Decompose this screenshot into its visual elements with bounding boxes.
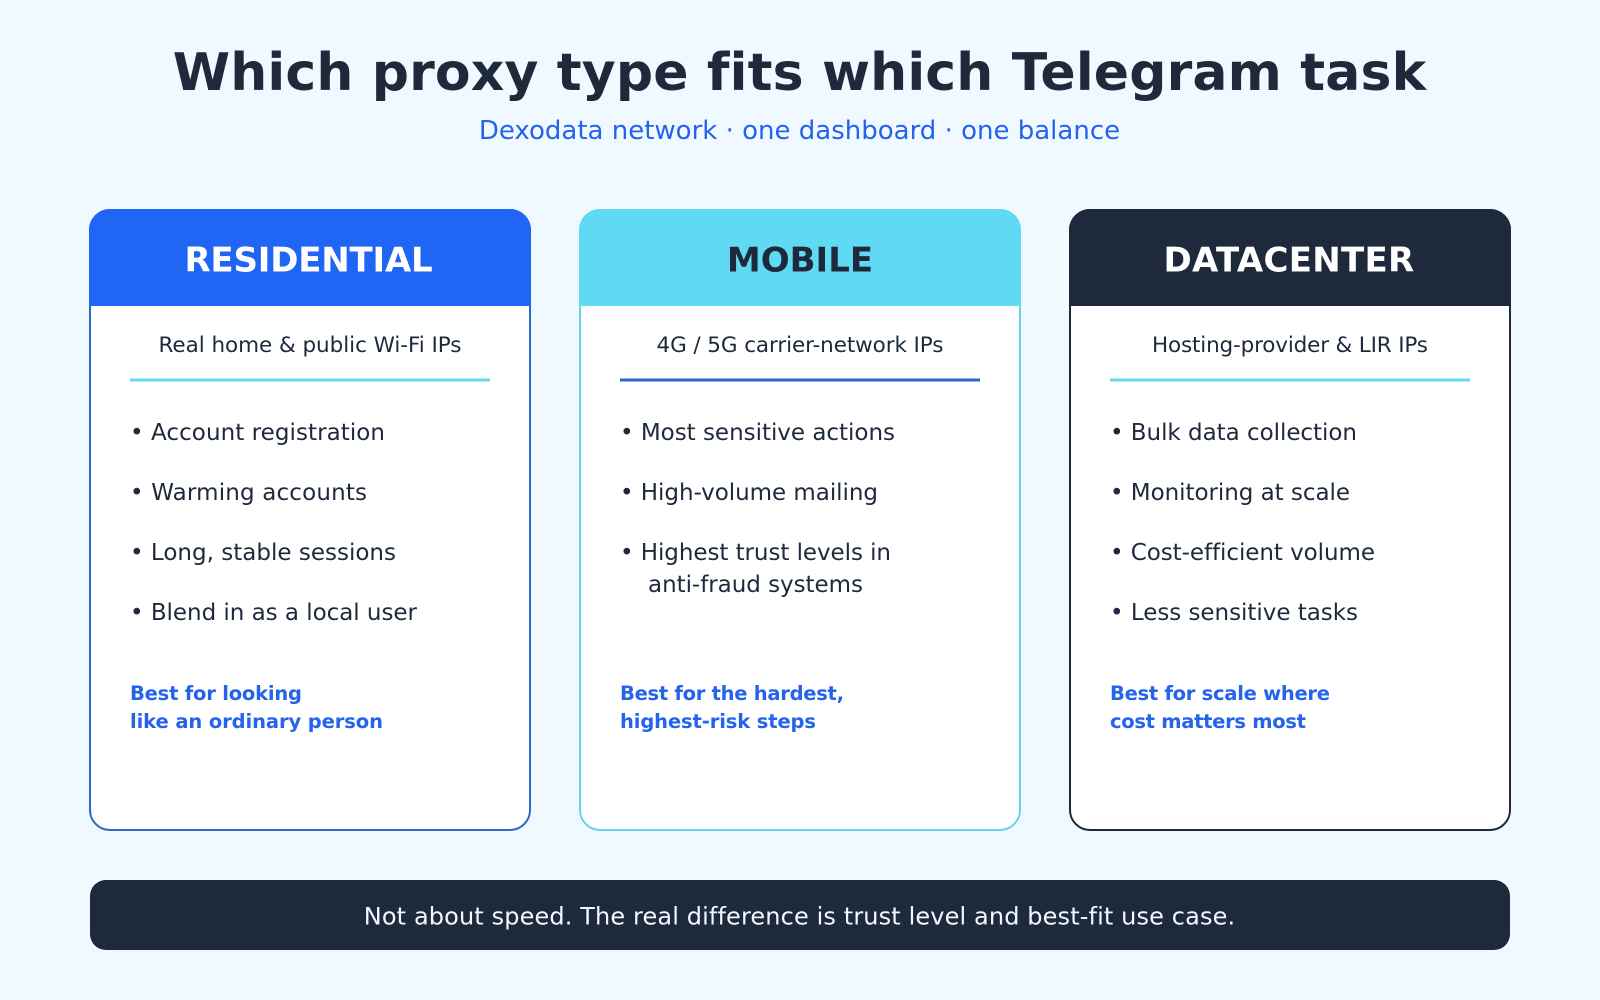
subtitle: Dexodata network · one dashboard · one balance: [479, 116, 1120, 146]
mobile use cases: • High-volume mailing: [620, 480, 878, 506]
callout banner: Not about speed. The real difference is trust level and best-fit use case.: [364, 902, 1235, 930]
datacenter use cases: • Less sensitive tasks: [1110, 600, 1358, 626]
callout banner: [90, 880, 1510, 950]
mobile best-for note: Best for the hardest,: [620, 682, 844, 705]
mobile use cases: • Highest trust levels in: [620, 540, 891, 566]
mobile descriptor: 4G / 5G carrier-network IPs: [656, 333, 944, 358]
datacenter best-for note: Best for scale where: [1110, 682, 1330, 705]
residential use cases: • Long, stable sessions: [130, 540, 396, 566]
residential descriptor: Real home & public Wi-Fi IPs: [158, 333, 462, 358]
datacenter heading: DATACENTER: [1164, 240, 1414, 280]
datacenter use cases: • Cost-efficient volume: [1110, 540, 1375, 566]
residential best-for note: Best for looking: [130, 682, 302, 705]
residential header: [89, 209, 531, 306]
panel: datacenter: [1069, 209, 1511, 830]
mobile best-for note: highest-risk steps: [620, 710, 816, 733]
panel: mobile: [579, 209, 1021, 830]
mobile use cases: anti-fraud systems: [648, 572, 863, 598]
datacenter use cases: • Bulk data collection: [1110, 420, 1357, 446]
datacenter best-for note: [1110, 682, 1330, 733]
mobile best-for note: [620, 682, 844, 733]
mobile use cases: • Most sensitive actions: [620, 420, 895, 446]
residential best-for note: [130, 682, 383, 733]
residential use cases: [130, 420, 418, 626]
mobile use cases: [620, 420, 895, 598]
datacenter use cases: [1110, 420, 1375, 626]
residential use cases: • Warming accounts: [130, 480, 367, 506]
residential best-for note: like an ordinary person: [130, 710, 383, 733]
residential use cases: • Account registration: [130, 420, 385, 446]
residential use cases: • Blend in as a local user: [130, 600, 418, 626]
datacenter header: [1069, 209, 1511, 306]
title: Which proxy type fits which Telegram task: [173, 43, 1428, 103]
residential heading: RESIDENTIAL: [184, 240, 433, 280]
datacenter best-for note: cost matters most: [1110, 710, 1306, 733]
datacenter descriptor: Hosting-provider & LIR IPs: [1152, 333, 1428, 358]
mobile heading: MOBILE: [727, 240, 873, 280]
datacenter use cases: • Monitoring at scale: [1110, 480, 1350, 506]
panel: residential: [89, 209, 531, 830]
mobile header: [579, 209, 1021, 306]
